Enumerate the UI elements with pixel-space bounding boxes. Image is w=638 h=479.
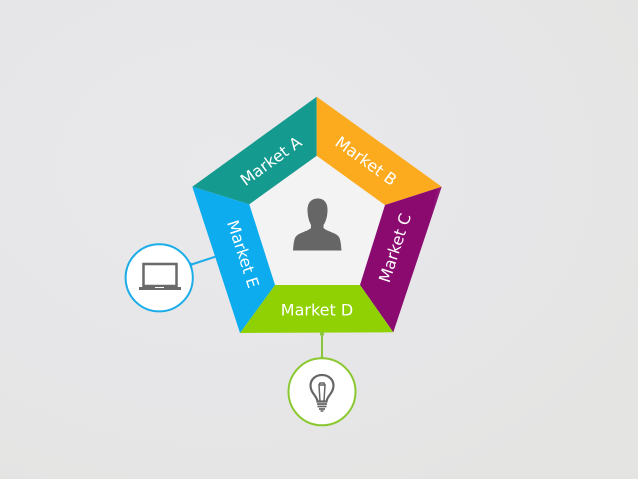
segment: Market A: [192, 97, 317, 204]
segment: Market D: [240, 285, 393, 333]
segment: Market D: Market D: [281, 300, 353, 320]
segment: Market E: Market E: [223, 218, 263, 290]
segment: Market B: Market B: [332, 132, 400, 190]
callout: laptop: [126, 244, 193, 311]
icon: laptop: [139, 264, 181, 290]
callout: light bulb: [288, 358, 356, 425]
icon: person: [293, 198, 342, 250]
icon: light bulb: [310, 375, 334, 411]
segment: Market C: [360, 187, 442, 332]
segment: Market C: Market C: [375, 211, 415, 285]
panel: centre: [249, 156, 385, 285]
connector: Market E to laptop: [188, 256, 216, 268]
connector: Market D to bulb: [320, 332, 324, 362]
segment: Market E: [192, 187, 275, 333]
pentagon diagram: [192, 97, 442, 333]
segment: Market A: Market A: [237, 132, 305, 190]
segment: Market B: [317, 97, 442, 205]
